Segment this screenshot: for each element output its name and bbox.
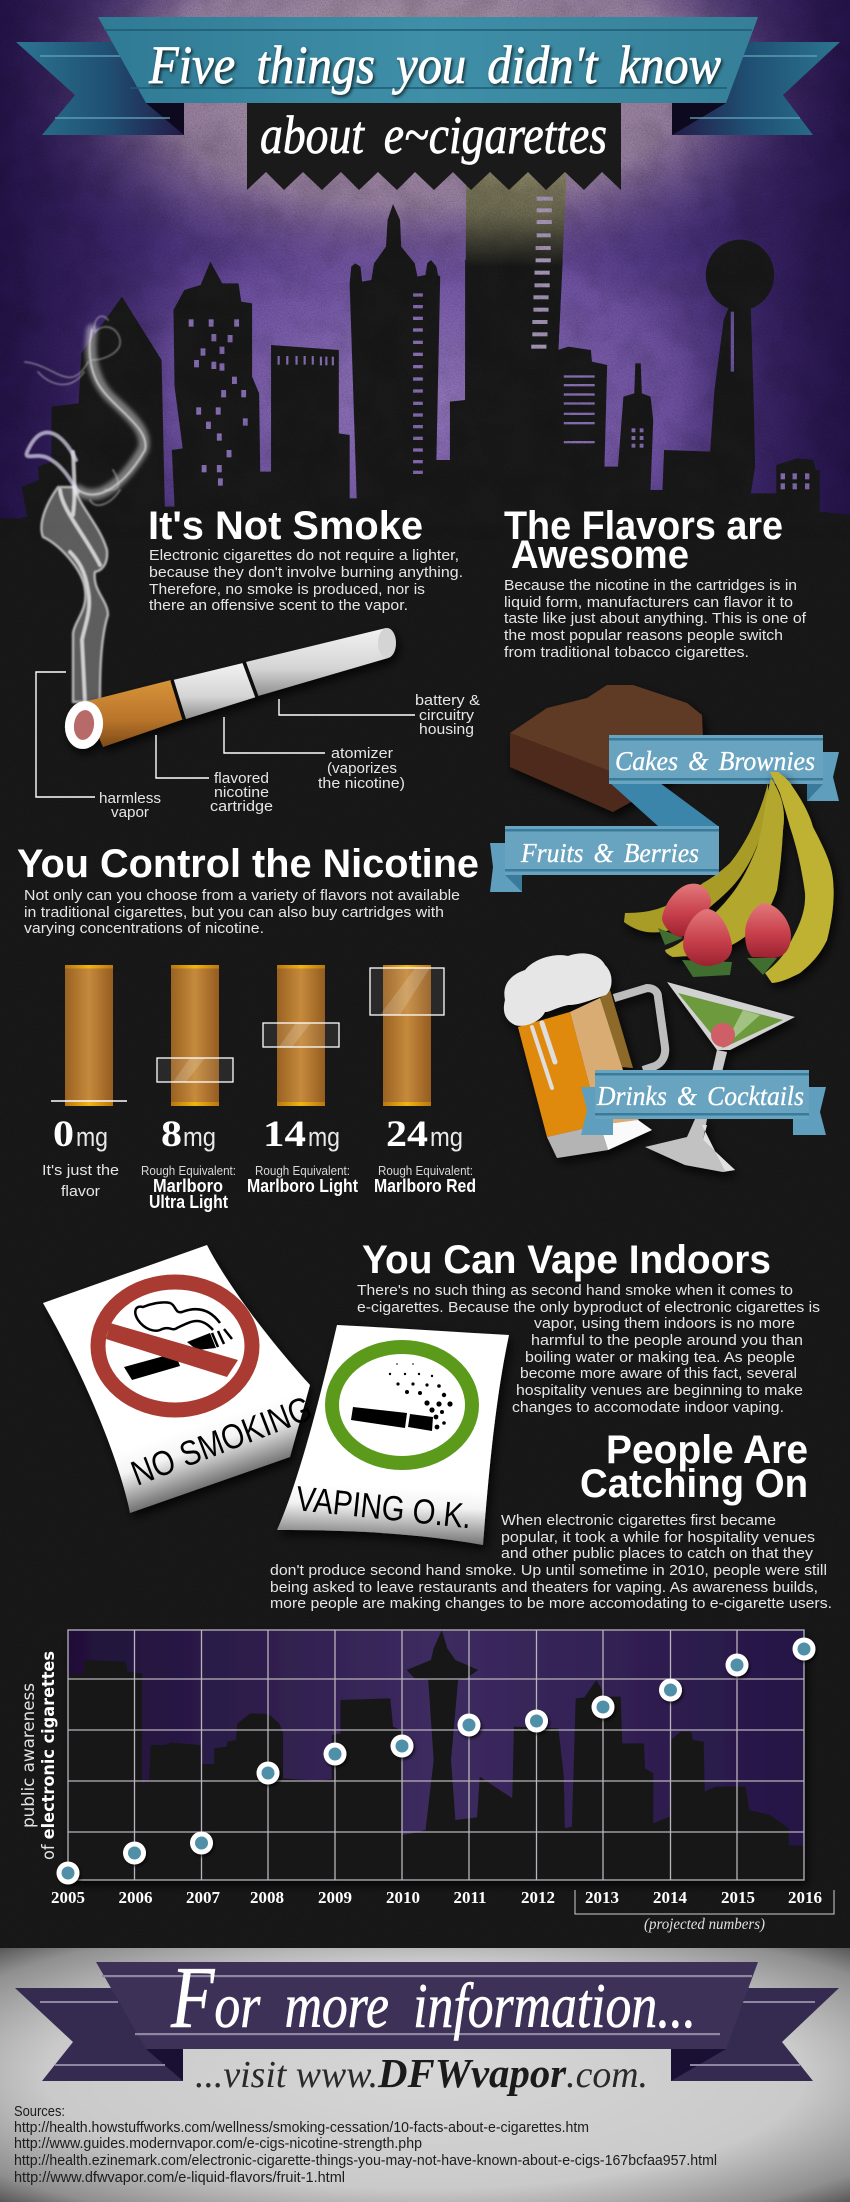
callout labels: the nicotine) [318, 775, 405, 792]
icon: vapor dots [389, 1363, 453, 1429]
body text: e-cigarettes. Because the only byproduct of electronic cigarettes is [357, 1299, 820, 1316]
heading: People Are [606, 1428, 808, 1472]
flavors illustration: cakes and fruit [490, 685, 839, 983]
callout labels: nicotine [214, 784, 269, 801]
no smoking sign [43, 1245, 317, 1513]
torn black label [247, 103, 621, 190]
ribbon tail: cakes [807, 752, 839, 801]
heading [580, 1428, 808, 1506]
heading [504, 504, 783, 577]
ribbon: cakes & brownies [609, 735, 823, 784]
side curl [27, 432, 78, 492]
cartridge: 14mg [247, 965, 358, 1196]
body text: there an offensive scent to the vapor. [149, 597, 408, 614]
cartridge: 8mg: Rough Equivalent: [141, 1163, 236, 1178]
background: dark chalkboard [0, 525, 850, 1950]
body text [504, 577, 807, 661]
ribbon fold shadows [146, 103, 726, 135]
grid lines [68, 1630, 804, 1880]
awareness line chart [19, 1630, 834, 1933]
sources: http://www.dfwvapor.com/e-liquid-flavors/fruit-1.html [14, 2169, 345, 2186]
icon: martini glass [645, 982, 795, 1172]
cartridge: 8mg [141, 965, 236, 1212]
section: You Can Vape Indoors [357, 1238, 820, 1416]
callout labels: atomizer [331, 745, 393, 762]
cartridge: 24mg: Marlboro Red [374, 1176, 476, 1196]
lower plume [41, 487, 108, 702]
tower windows [531, 197, 553, 349]
callout labels [99, 692, 480, 821]
x axis year labels [51, 1888, 822, 1907]
chart background [68, 1630, 804, 1880]
icon: beer mug [504, 953, 665, 1158]
heading: It's Not Smoke [148, 504, 423, 548]
callout labels: circuitry [419, 707, 475, 724]
vaping ok sign [277, 1325, 509, 1545]
body text: boiling water or making tea. As people [525, 1349, 795, 1366]
downtown tower with light [465, 173, 566, 400]
title banner [16, 17, 840, 190]
x axis year labels: 2014 [653, 1888, 688, 1907]
website line: ...visit www.DFWvapor.com. [195, 2050, 648, 2096]
body text [149, 547, 463, 614]
body text: Electronic cigarettes do not require a lighter, [149, 547, 459, 564]
drinks illustration [504, 953, 826, 1172]
body text: and other public places to catch on that they [501, 1545, 814, 1562]
footer panel [0, 1948, 850, 2202]
cartridge: 0mg: flavor [61, 1183, 100, 1200]
x axis year labels: 2008 [250, 1888, 284, 1907]
heading: You Can Vape Indoors [362, 1238, 771, 1282]
body text: Because the nicotine in the cartridges is in [504, 577, 797, 594]
section: People Are Catching On [270, 1428, 832, 1612]
x axis year labels: 2009 [318, 1888, 352, 1907]
section: You Control the Nicotine [17, 842, 479, 937]
cartridge: 0mg: 0 [53, 1114, 74, 1155]
y axis label: public awareness [19, 1683, 39, 1828]
cartridge: 0mg: It's just the [42, 1162, 119, 1179]
body text: Therefore, no smoke is produced, nor is [149, 581, 425, 598]
ribbon: cakes & brownies: Cakes & Brownies [615, 746, 815, 776]
cartridge: 14mg: Rough Equivalent: [255, 1163, 350, 1178]
nicotine cartridge chart [42, 965, 476, 1212]
body text: don't produce second hand smoke. Up until sometime in 2010, people were still [270, 1562, 827, 1579]
body text [24, 887, 460, 937]
cartridge: 0mg: mg [76, 1122, 108, 1152]
cartridge: 8mg: Ultra Light [149, 1192, 228, 1212]
icon: e-cigarette [351, 1407, 433, 1431]
callout labels: (vaporizes [327, 760, 397, 777]
sources: http://health.howstuffworks.com/wellness/smoking-cessation/10-facts-about-e-cigarettes.htm [14, 2119, 589, 2136]
skyline silhouette [0, 173, 850, 550]
footer ribbon [15, 1950, 839, 2081]
body text: the most popular reasons people switch [504, 627, 783, 644]
cartridge: 24mg: mg [430, 1122, 463, 1152]
cartridge: 14mg: mg [308, 1122, 340, 1152]
tower slit [731, 312, 734, 372]
body text: popular, it took a while for hospitality venues [501, 1529, 815, 1546]
sources: http://health.ezinemark.com/electronic-cigarette-things-you-may-not-have-known-about-e-cigs-167bcfaa957.html [14, 2152, 717, 2169]
smoke [25, 316, 146, 702]
heading: Awesome [511, 533, 689, 577]
body text: more people are making changes to be more accomodating to e-cigarette users. [270, 1595, 832, 1612]
icon: bananas [624, 772, 834, 983]
cartridge: 14mg: Marlboro Light [247, 1176, 358, 1196]
body text: vapor, using them indoors is no more [534, 1315, 795, 1332]
x axis year labels: 2016 [788, 1888, 822, 1907]
callout labels: housing [419, 721, 474, 738]
ribbon tail left [16, 42, 184, 135]
paper background [0, 1948, 850, 2202]
callout labels: battery & [415, 692, 480, 709]
lit windows [189, 293, 809, 489]
title line 2: about e~cigarettes [260, 105, 607, 165]
body text: taste like just about anything. This is one of [504, 610, 807, 627]
x axis year labels: 2012 [521, 1888, 555, 1907]
ribbon connector [610, 783, 718, 826]
body text: in traditional cigarettes, but you can also buy cartridges with [24, 904, 444, 921]
body text [357, 1282, 820, 1416]
x axis year labels: 2013 [585, 1888, 619, 1907]
x axis year labels: 2005 [51, 1888, 85, 1907]
sign text: NO SMOKING [126, 1389, 317, 1493]
heading: Catching On [580, 1462, 808, 1506]
sign text: VAPING O.K. [294, 1479, 473, 1536]
cartridge: 8mg: mg [183, 1122, 216, 1152]
body text: liquid form, manufacturers can flavor it to [504, 594, 793, 611]
body text: because they don't involve burning anything. [149, 564, 463, 581]
x axis year labels: 2006 [118, 1888, 152, 1907]
callout labels: cartridge [210, 798, 273, 815]
body text: changes to accomodate indoor vaping. [512, 1399, 784, 1416]
footer heading: For more information... [170, 1950, 696, 2047]
cartridge: 24mg: 24 [386, 1114, 428, 1155]
x axis year labels: 2015 [721, 1888, 755, 1907]
round observation tower [706, 240, 774, 310]
section: It's Not Smoke [148, 504, 463, 614]
icon: green ring [332, 1347, 472, 1463]
cartridge: 14mg: 14 [263, 1114, 306, 1155]
callout labels: harmless [99, 790, 161, 807]
callout labels: vapor [111, 804, 149, 821]
body text: harmful to the people around you than [531, 1332, 803, 1349]
body text: Not only can you choose from a variety of flavors not available [24, 887, 460, 904]
ribbon tail right [672, 42, 840, 135]
y axis label: of electronic cigarettes [39, 1651, 59, 1860]
body text [270, 1512, 832, 1612]
cartridge: 24mg [370, 965, 476, 1196]
projected numbers bracket: (projected numbers) [644, 1916, 765, 1933]
body text: There's no such thing as second hand smoke when it comes to [357, 1282, 793, 1299]
x axis year labels: 2011 [453, 1888, 487, 1907]
body text: varying concentrations of nicotine. [24, 920, 264, 937]
body text: hospitality venues are beginning to make [516, 1382, 803, 1399]
ribbon tail: fruits [490, 843, 522, 892]
body text: When electronic cigarettes first became [501, 1512, 776, 1529]
cartridge: 0mg [42, 965, 127, 1200]
section: The Flavors are Awesome [504, 504, 807, 661]
heading: You Control the Nicotine [17, 842, 479, 886]
x axis year labels: 2010 [386, 1888, 420, 1907]
data points [56, 1638, 816, 1884]
heading: The Flavors are [504, 504, 783, 548]
callout labels: flavored [214, 770, 269, 787]
chart skyline [68, 1630, 804, 1880]
projected numbers bracket [575, 1890, 834, 1933]
icon: strawberries [658, 884, 791, 977]
sources [14, 2103, 717, 2186]
ribbon: drinks & cocktails: Drinks & Cocktails [596, 1081, 804, 1111]
body text: being asked to leave restaurants and theaters for vaping. As awareness builds, [270, 1579, 818, 1596]
title line 1: Five things you didn't know [148, 35, 721, 95]
ribbon tails: drinks [581, 1087, 826, 1135]
cartridge: 24mg: Rough Equivalent: [378, 1163, 473, 1178]
icon: brownie [510, 685, 703, 812]
top wisps [25, 316, 120, 385]
background: purple sky [0, 0, 850, 560]
upper swirl [78, 330, 144, 494]
icon: cigarette and smoke [124, 1302, 232, 1380]
ribbon: fruits & berries: Fruits & Berries [520, 838, 699, 868]
ribbon: fruits & berries [505, 826, 719, 875]
ribbon main [98, 17, 758, 103]
x axis year labels: 2007 [186, 1888, 220, 1907]
cigarette body [62, 628, 396, 751]
e-cigarette diagram [36, 628, 480, 821]
ribbon: drinks & cocktails [595, 1070, 809, 1119]
callout lines [36, 672, 415, 797]
icon: red prohibition ring [98, 1282, 252, 1410]
body text: become more aware of this fact, several [520, 1365, 797, 1382]
sources: Sources: [14, 2103, 65, 2120]
sources: http://www.guides.modernvapor.com/e-cigs-nicotine-strength.php [14, 2135, 422, 2152]
y axis label [19, 1651, 59, 1860]
body text: from traditional tobacco cigarettes. [504, 644, 749, 661]
cartridge: 8mg: Marlboro [153, 1176, 223, 1196]
cartridge: 8mg: 8 [161, 1114, 182, 1155]
